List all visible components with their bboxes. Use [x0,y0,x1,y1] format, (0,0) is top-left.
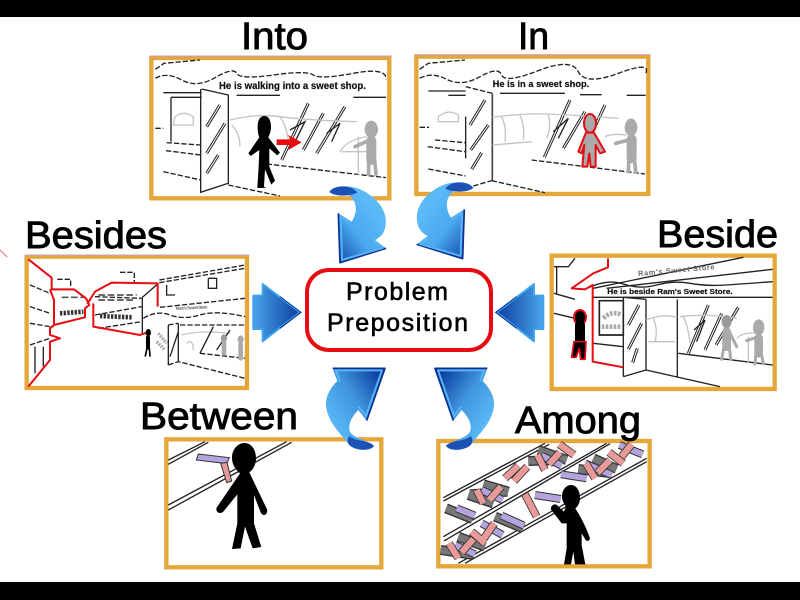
heading: Besides: Besides [25,215,167,257]
arrow: among to centre [435,368,494,450]
man with red halo [572,310,586,359]
pink cartons [449,444,632,558]
central box [307,270,491,350]
panel: in [414,55,651,194]
gray people [722,315,764,364]
heading: Beside: Beside [657,214,778,256]
panel: among [438,441,650,566]
heading: Between: Between [140,396,298,438]
heading: In: In [518,16,549,58]
pink carton [221,462,232,483]
awning name: Ram's Sweet Store [638,262,715,278]
gray shopkeeper [355,121,378,174]
arrow: in to centre [417,182,473,259]
top black bar [0,0,800,17]
gray people [221,334,244,358]
man reaching [551,485,590,564]
arrow: into to centre [329,186,386,263]
caption: He is in a sweet shop. [493,79,589,89]
conveyor rails [443,443,647,563]
red outlined person [578,114,605,167]
panel: beside [552,256,775,389]
heading: Into: Into [241,16,308,58]
red shop outline [572,258,623,367]
heading: Among: Among [515,400,641,442]
caption: He is walking into a sweet shop. [219,81,366,92]
panel: between [166,439,381,567]
tiny sign: Ram's Sweet Store [176,304,208,311]
central label: Problem [346,278,448,306]
gray shopkeeper [616,119,637,172]
purple cartons [455,445,643,554]
central label: Preposition [327,309,468,337]
red outlines of the street [28,259,158,387]
panel: besides [25,255,249,388]
caption: He is beside Ram's Sweet Store. [607,287,733,296]
small man [145,329,151,356]
gray cartons [441,450,617,555]
panel: into [149,56,392,198]
arrow: between to centre [326,368,385,450]
large man [216,443,267,549]
arrow: besides to centre [253,284,301,341]
man walking [248,116,280,188]
bottom black bar [0,582,800,600]
conveyor rails [168,442,292,510]
arrow: beside to centre [496,284,543,341]
stray red mark [0,250,7,257]
red arrow [277,135,302,150]
purple carton [196,454,229,464]
